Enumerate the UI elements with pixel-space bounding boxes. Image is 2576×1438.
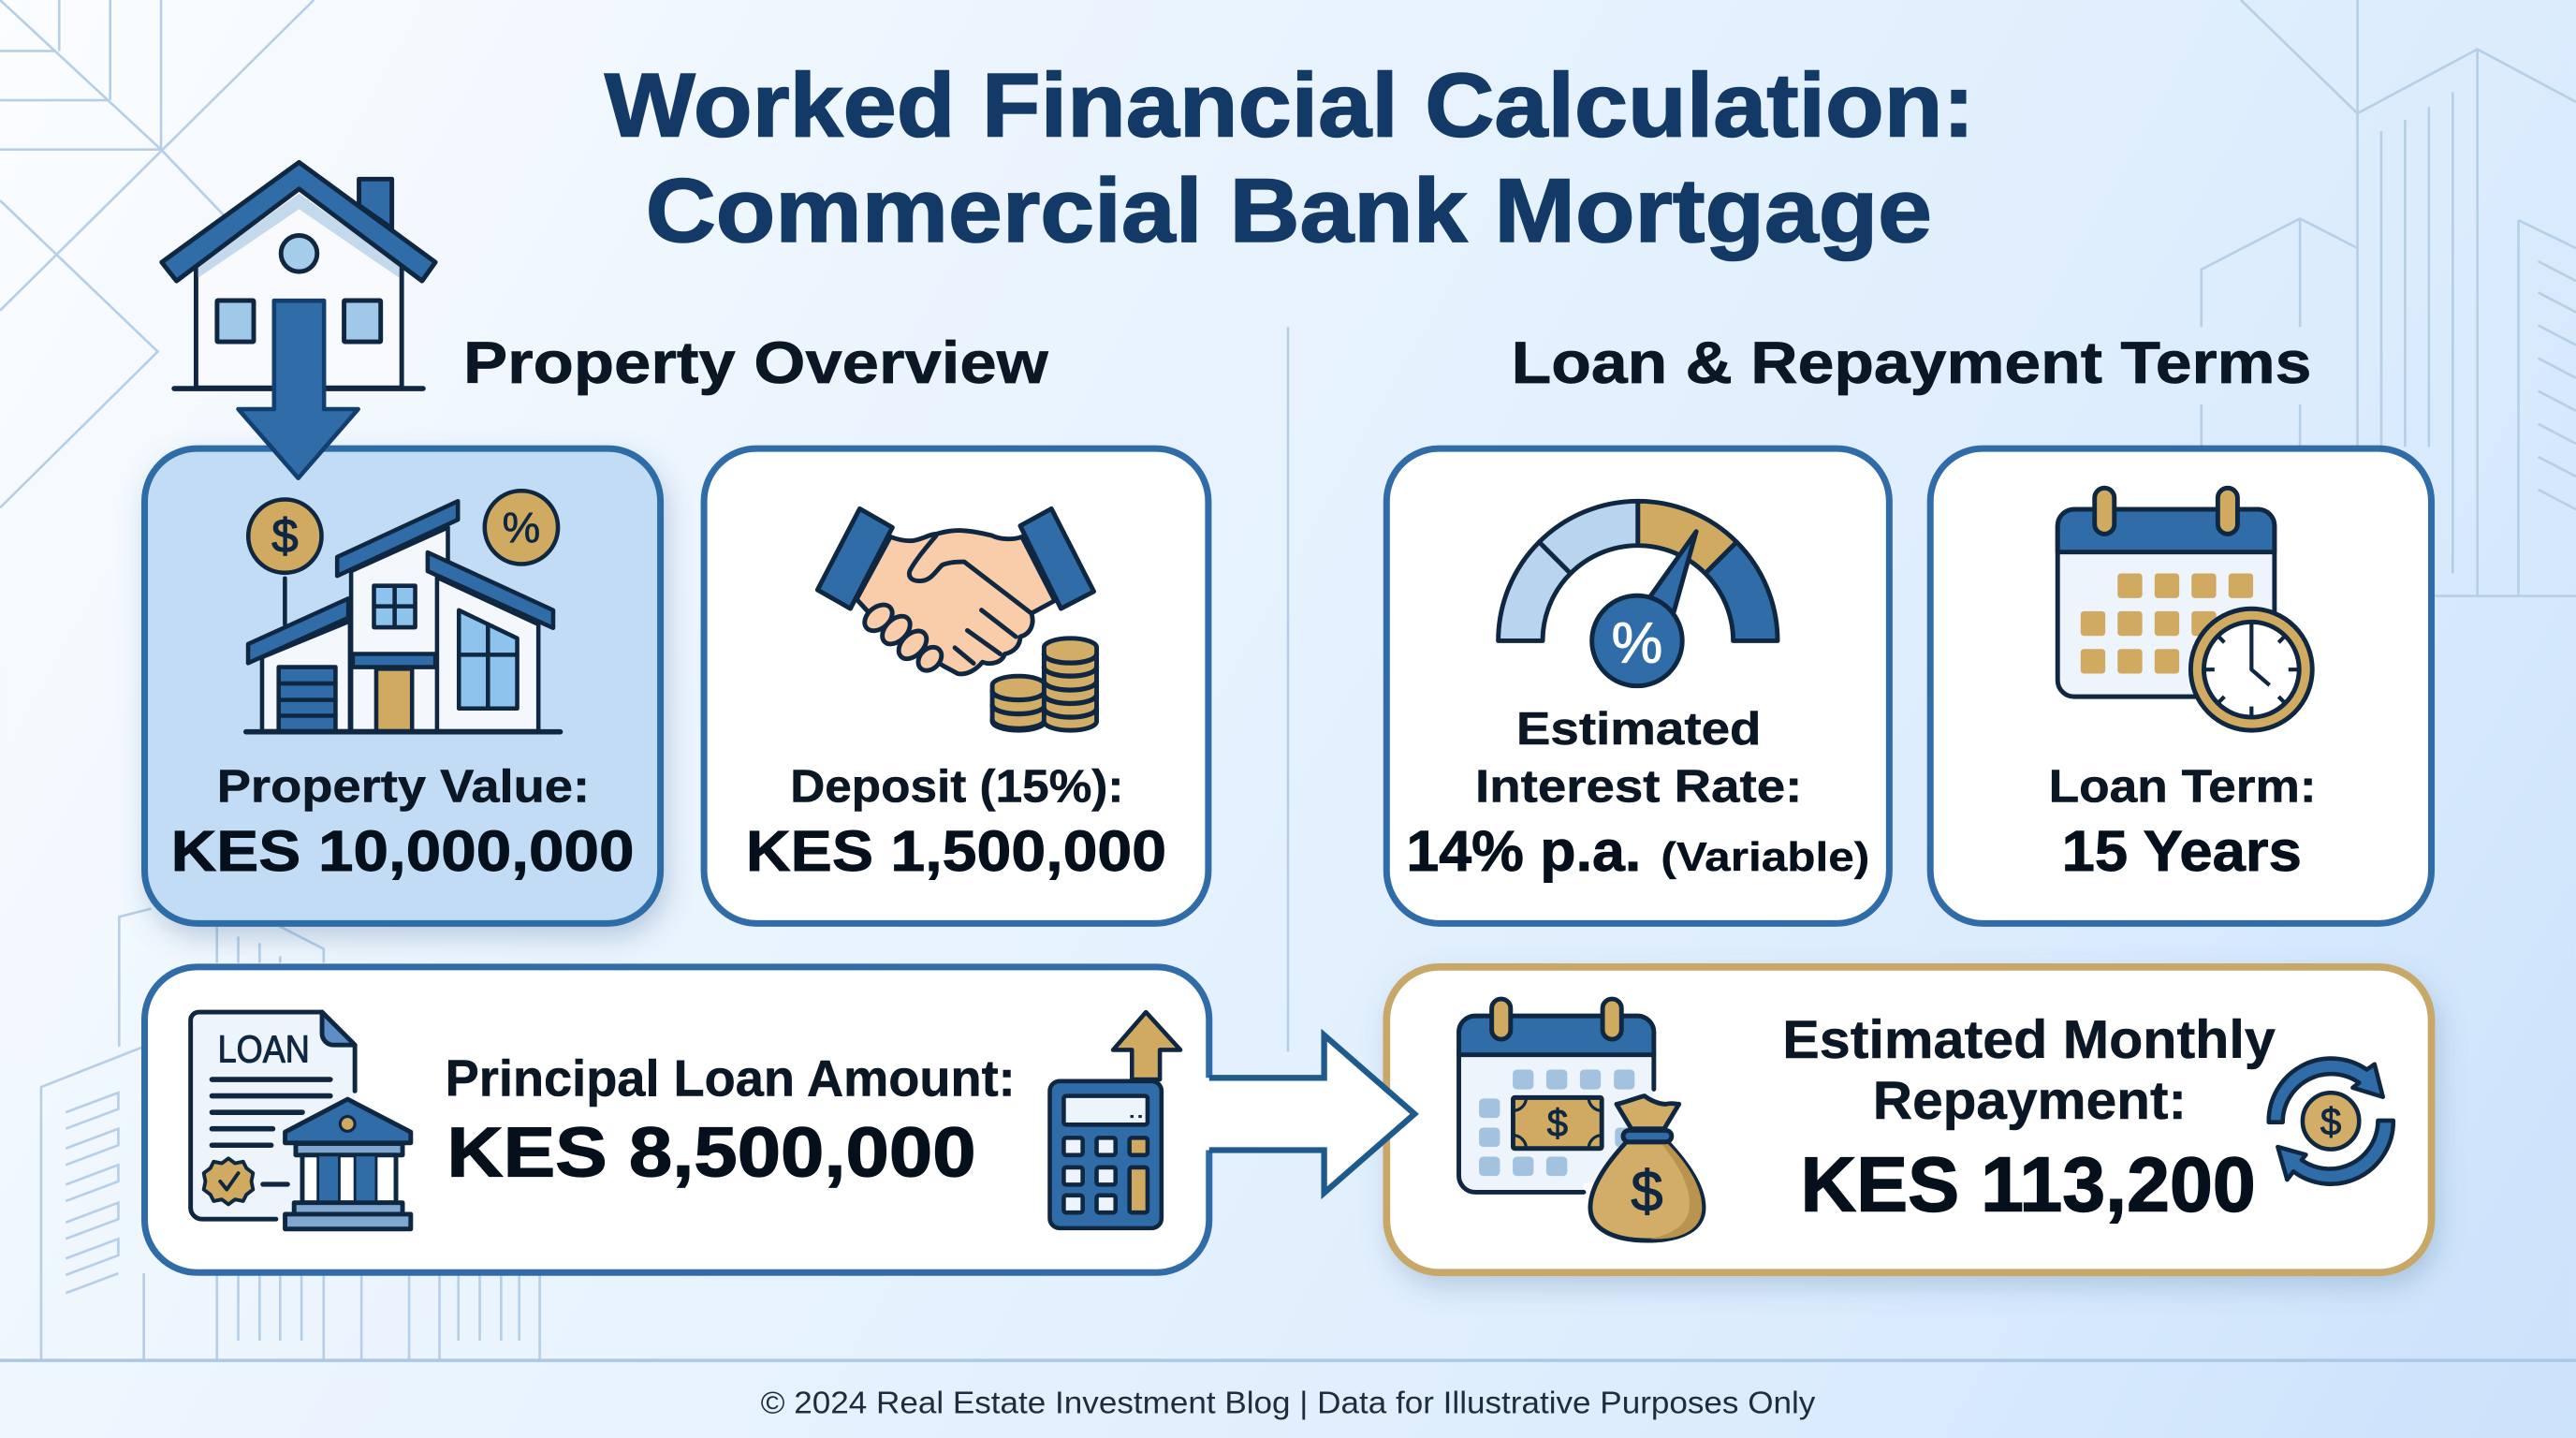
label: principal loan amount: Principal Loan Amount: [446,1050,1016,1108]
icon: interest gauge: % [1612,610,1662,675]
icon: calculator with up arrow [1050,1012,1180,1228]
panel: property value [145,448,661,923]
label: estimated monthly repayment: Estimated Monthly [1782,1010,2276,1070]
icon: calendar with banknote and money bag [1458,999,1704,1240]
title: Commercial Bank Mortgage [646,161,1932,261]
label: estimated interest rate: Estimated [1516,704,1761,755]
icon: calendar with banknote and money bag: $ [1631,1159,1663,1224]
heading: loan and repayment terms: Loan & Repayment Terms [1512,330,2311,396]
label: property value: Property Value: [217,761,590,812]
icon: repayment cycle with coin: $ [2320,1100,2341,1143]
arrow: principal to monthly repayment [1204,1035,1414,1193]
icon: modern house with dollar and percent coins [246,491,561,732]
icon: calendar with clock [2057,488,2312,730]
value: interest rate: (Variable) [1661,834,1869,880]
icon: interest gauge [1499,501,1778,686]
label: loan term: Loan Term: [2049,761,2317,812]
panel: interest rate [1386,448,1889,923]
value: principal loan amount: KES 8,500,000 [446,1113,976,1192]
value: property value: KES 10,000,000 [171,819,634,884]
icon: house with down arrow [162,162,435,478]
label: estimated monthly repayment: Repayment: [1873,1071,2187,1131]
icon: loan document and bank: LOAN [218,1028,310,1071]
panel: loan term [1930,448,2431,923]
label: deposit: Deposit (15%): [790,761,1123,812]
icon: handshake with coins [817,508,1097,730]
label: estimated monthly repayment [1782,1010,2276,1131]
icon: loan document and bank [191,1012,411,1229]
value: deposit: KES 1,500,000 [746,819,1166,884]
label: estimated interest rate: Interest Rate: [1475,761,1802,812]
panel: deposit [704,448,1208,923]
footer: © 2024 Real Estate Investment Blog | Data for Illustrative Purposes Only [761,1386,1816,1420]
icon: calendar with banknote and money bag: $ [1547,1102,1568,1145]
heading: property overview: Property Overview [463,330,1049,396]
icon: modern house with dollar and percent coins: % [503,504,540,551]
value: monthly repayment: KES 113,200 [1801,1141,2256,1227]
title: Worked Financial Calculation: [605,56,1975,156]
panel: estimated monthly repayment [1386,967,2431,1272]
panel: principal loan amount [145,967,1209,1272]
label: estimated interest rate [1475,704,1802,812]
icon: modern house with dollar and percent coins: $ [271,509,299,563]
icon: repayment cycle with coin [2269,1059,2393,1184]
value: interest rate: 14% p.a. [1406,819,1641,884]
value: interest rate [1406,819,1869,884]
title [605,56,1975,261]
value: loan term: 15 Years [2062,819,2302,884]
